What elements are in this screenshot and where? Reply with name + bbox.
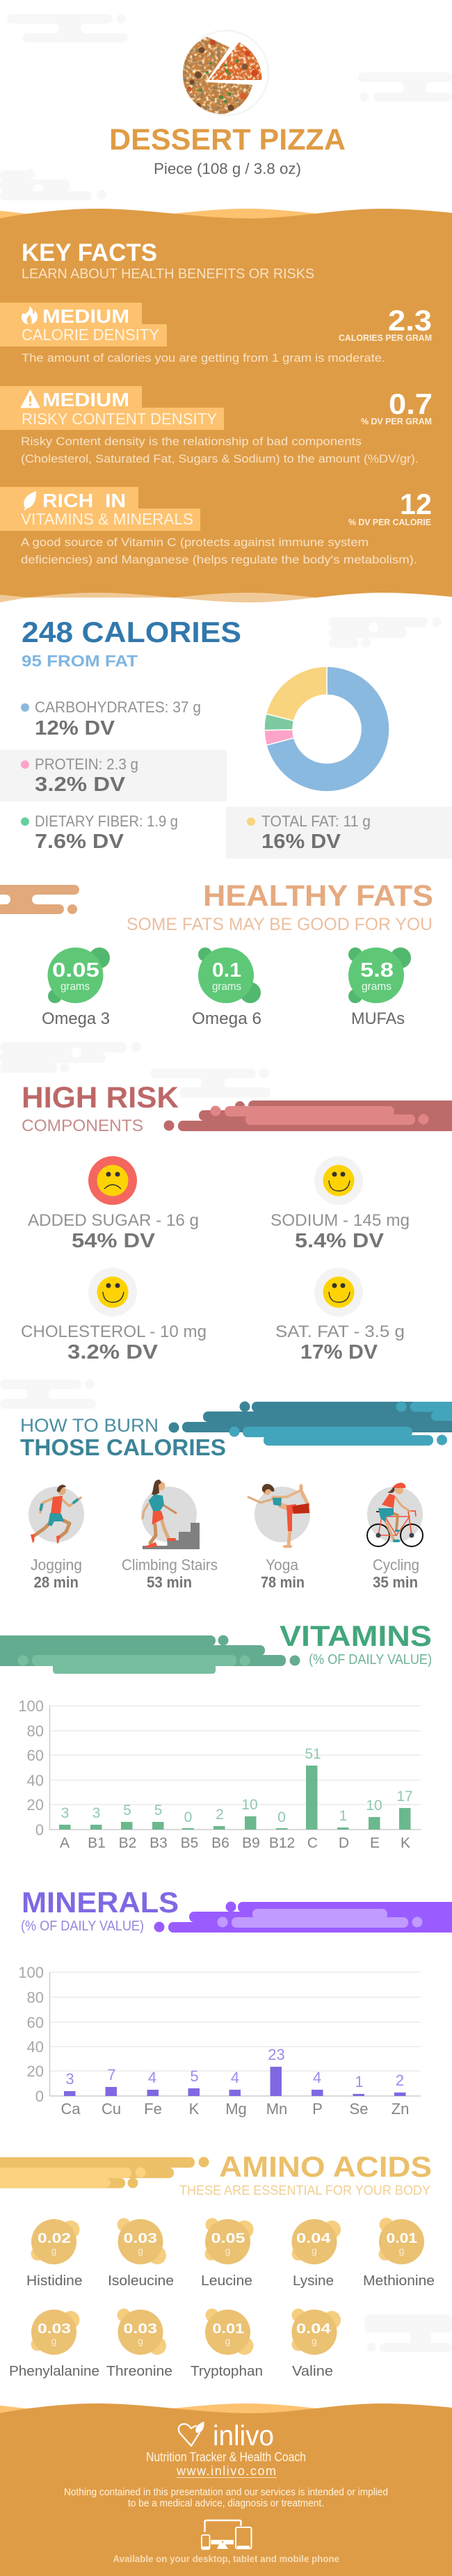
fat: omega 6	[192, 947, 261, 1028]
amino: threonine: 0.03	[124, 2321, 157, 2337]
website: www.inlivo.com	[176, 2464, 276, 2478]
amino: valine: 0.04	[296, 2321, 331, 2337]
bar chart: minerals: 7	[107, 2066, 116, 2083]
amino: valine: Valine	[292, 2364, 333, 2379]
bar chart: vitamins: 17	[396, 1789, 413, 1805]
subheading: THESE ARE ESSENTIAL FOR YOUR BODY	[179, 2184, 430, 2198]
bar chart: minerals: Ca	[60, 2100, 81, 2118]
bar chart: minerals	[18, 1964, 421, 2118]
bar chart: vitamins	[18, 1697, 421, 1851]
activity: yoga: Yoga	[266, 1556, 299, 1574]
bar chart: vitamins: 20	[27, 1796, 44, 1814]
activity: cycling	[367, 1482, 423, 1591]
panel: amino acids	[0, 2150, 435, 2379]
bar chart: vitamins: 40	[27, 1772, 44, 1789]
amino: histidine	[26, 2219, 82, 2289]
availability note: Available on your desktop, tablet and mobile phone	[113, 2553, 339, 2564]
description: The amount of calories you are getting from 1 gram is moderate.	[22, 351, 385, 365]
logo: inlivo	[213, 2419, 274, 2451]
banner	[0, 2157, 209, 2189]
bar chart: minerals: 0	[35, 2088, 44, 2105]
panel: healthy fats	[0, 879, 433, 1028]
item: cholesterol	[21, 1267, 207, 1363]
subheading: COMPONENTS	[22, 1117, 143, 1135]
bar chart: vitamins: 10	[366, 1798, 382, 1814]
item: added sugar: 54% DV	[72, 1230, 156, 1252]
amino: methionine	[363, 2218, 435, 2289]
heading: 248 CALORIES	[22, 616, 241, 648]
item: cholesterol: CHOLESTEROL - 10 mg	[21, 1322, 207, 1341]
banner	[154, 1902, 452, 1933]
amino: isoleucine: 0.03	[124, 2230, 157, 2246]
bar chart: minerals: Cu	[102, 2100, 121, 2118]
value: 0.7	[389, 387, 433, 420]
bar chart: vitamins: 0	[35, 1821, 44, 1839]
amino: phenylalanine: Phenylalanine	[9, 2364, 99, 2379]
amino: threonine: g	[138, 2335, 143, 2346]
value: 2.3	[388, 304, 432, 337]
amino: phenylalanine	[9, 2310, 99, 2379]
bar chart: minerals: 1	[355, 2073, 364, 2090]
fat: omega 3	[42, 947, 110, 1028]
amino: threonine	[106, 2308, 172, 2379]
fat: omega 3: 0.05	[52, 959, 99, 982]
bar chart: vitamins: 5	[154, 1802, 162, 1818]
item: added sugar	[28, 1156, 199, 1252]
amino: methionine: g	[399, 2245, 404, 2256]
amino: tryptophan	[191, 2308, 263, 2379]
subheading: (% OF DAILY VALUE)	[309, 1652, 432, 1667]
activity: climbing stairs: 53 min	[147, 1574, 192, 1591]
bar chart: vitamins: 0	[277, 1809, 286, 1825]
legend: total fat: 16% DV	[261, 831, 341, 853]
item: saturated fat	[275, 1267, 405, 1363]
legend: dietary fiber: DIETARY FIBER: 1.9 g	[35, 813, 178, 830]
header: pizza image and title	[109, 31, 346, 177]
bar chart: vitamins: 80	[27, 1722, 44, 1740]
amino: isoleucine: Isoleucine	[108, 2273, 174, 2289]
panel: how to burn calories	[20, 1401, 452, 1591]
wave	[0, 2403, 320, 2424]
bar chart: vitamins: B3	[150, 1835, 168, 1851]
panel: minerals	[18, 1886, 452, 2118]
amino: histidine: g	[51, 2245, 56, 2256]
wave top	[0, 209, 320, 230]
bar chart: minerals: Fe	[144, 2100, 162, 2118]
description: deficiencies) and Manganese (helps regulate the body's metabolism).	[21, 553, 417, 566]
activity: climbing stairs	[122, 1480, 218, 1591]
icon: leaf	[24, 491, 36, 511]
fact: calorie density	[0, 303, 432, 365]
bar chart: vitamins: 1	[339, 1808, 347, 1824]
title: DESSERT PIZZA	[109, 123, 346, 157]
item: cholesterol: 3.2% DV	[67, 1341, 159, 1363]
bar chart: minerals: K	[189, 2100, 200, 2118]
bar chart: minerals: 100	[18, 1964, 44, 1981]
bar chart: vitamins: B2	[119, 1835, 136, 1851]
amino: threonine: Threonine	[106, 2364, 172, 2379]
disclaimer: to be a medical advice, diagnosis or treatment.	[128, 2497, 324, 2509]
amino: histidine: 0.02	[38, 2230, 71, 2246]
amino: leucine	[201, 2218, 253, 2289]
activity: climbing stairs: Climbing Stairs	[122, 1556, 218, 1574]
legend: dietary fiber	[21, 813, 178, 853]
amino: phenylalanine: g	[51, 2335, 56, 2346]
fact: risky content density	[0, 386, 433, 465]
description: (Cholesterol, Saturated Fat, Sugars & Sodium) to the amount (%DV/gr).	[21, 452, 419, 465]
tagline: Nutrition Tracker & Health Coach	[146, 2450, 306, 2464]
rating: RICH IN	[42, 490, 126, 511]
rating: MEDIUM	[42, 305, 129, 327]
activity: yoga	[248, 1484, 310, 1591]
unit: % DV PER CALORIE	[348, 517, 431, 527]
amino: phenylalanine: 0.03	[38, 2321, 71, 2337]
heading: HIGH RISK	[22, 1081, 179, 1114]
bar chart: minerals: Se	[350, 2100, 368, 2118]
rating: MEDIUM	[42, 389, 129, 410]
fat: MUFAs: 5.8	[360, 959, 394, 982]
amino: leucine: Leucine	[201, 2273, 252, 2289]
heading line 1: HOW TO BURN	[20, 1415, 159, 1436]
bar chart: vitamins: B5	[181, 1835, 198, 1851]
bar chart: minerals: 4	[313, 2069, 321, 2086]
heading: HEALTHY FATS	[203, 879, 433, 913]
fat: omega 6: grams	[212, 981, 241, 993]
subheading: LEARN ABOUT HEALTH BENEFITS OR RISKS	[22, 266, 314, 282]
panel: high risk components	[21, 1081, 452, 1363]
amino: histidine: Histidine	[26, 2273, 82, 2289]
label: CALORIE DENSITY	[22, 326, 159, 344]
bar chart: vitamins: B1	[88, 1835, 106, 1851]
bar chart: minerals: 2	[396, 2072, 404, 2089]
bar chart: minerals: Mg	[225, 2100, 247, 2118]
bar chart: vitamins: K	[401, 1835, 410, 1851]
bar chart: vitamins: 10	[241, 1797, 258, 1813]
logo	[179, 2419, 274, 2451]
subheading: SOME FATS MAY BE GOOD FOR YOU	[127, 915, 433, 934]
bar chart: vitamins: B6	[211, 1835, 229, 1851]
amino: isoleucine	[108, 2218, 174, 2289]
bar chart: vitamins: 0	[184, 1809, 192, 1825]
subheading: (% OF DAILY VALUE)	[21, 1919, 144, 1934]
item: saturated fat: 17% DV	[300, 1341, 378, 1363]
banner	[0, 885, 81, 914]
panel: key facts	[0, 209, 452, 602]
donut chart	[264, 666, 389, 792]
activity: jogging: Jogging	[31, 1556, 82, 1574]
bar chart: minerals: 80	[27, 1989, 44, 2006]
bar chart: minerals: Zn	[392, 2100, 409, 2118]
label: RISKY CONTENT DENSITY	[22, 410, 217, 428]
item: saturated fat: SAT. FAT - 3.5 g	[275, 1322, 405, 1341]
label: VITAMINS & MINERALS	[21, 510, 193, 528]
legend: carbohydrates	[21, 698, 201, 739]
fat: omega 3: grams	[60, 981, 90, 993]
legend: dietary fiber: 7.6% DV	[35, 831, 124, 853]
heading: MINERALS	[22, 1886, 179, 1919]
fat: omega 6: 0.1	[212, 959, 241, 982]
icon: devices	[202, 2520, 252, 2549]
amino: lysine: g	[312, 2245, 317, 2256]
bar chart: vitamins: 3	[92, 1805, 100, 1821]
description: A good source of Vitamin C (protects against immune system	[21, 536, 369, 549]
panel: calories	[0, 616, 452, 858]
activity: cycling: 35 min	[373, 1574, 418, 1591]
amino: tryptophan: Tryptophan	[191, 2364, 263, 2379]
disclaimer: Nothing contained in this presentation and our services is intended or implied	[64, 2486, 388, 2498]
heading line 2: THOSE CALORIES	[20, 1434, 226, 1460]
amino: isoleucine: g	[138, 2245, 143, 2256]
legend: carbohydrates: 12% DV	[35, 717, 115, 739]
legend: protein: PROTEIN: 2.3 g	[35, 755, 138, 773]
legend: protein: 3.2% DV	[35, 774, 126, 796]
bar chart: vitamins: B9	[242, 1835, 260, 1851]
bar chart: vitamins: 51	[305, 1746, 321, 1762]
value: 12	[400, 488, 432, 520]
bar chart: vitamins: D	[339, 1835, 349, 1851]
fat: omega 6: Omega 6	[192, 1009, 261, 1028]
fat: omega 3: Omega 3	[42, 1009, 110, 1028]
bar chart: vitamins: E	[370, 1835, 380, 1851]
amino: tryptophan: 0.01	[213, 2321, 244, 2337]
activity: cycling: Cycling	[373, 1556, 419, 1574]
bar chart: minerals: 40	[27, 2038, 44, 2056]
item: sodium: SODIUM - 145 mg	[271, 1211, 410, 1230]
amino: methionine: 0.01	[387, 2230, 417, 2246]
panel: footer	[0, 2403, 452, 2576]
legend: total fat: TOTAL FAT: 11 g	[261, 813, 371, 830]
amino: lysine	[292, 2219, 341, 2289]
serving size: Piece (108 g / 3.8 oz)	[154, 160, 301, 177]
heading: AMINO ACIDS	[219, 2150, 432, 2183]
item: added sugar: ADDED SUGAR - 16 g	[28, 1211, 199, 1230]
heading: KEY FACTS	[22, 239, 157, 266]
icon: warning	[21, 390, 40, 408]
bar chart: vitamins: 2	[216, 1807, 224, 1823]
amino: lysine: Lysine	[293, 2273, 334, 2289]
amino: tryptophan: g	[225, 2335, 230, 2346]
bar chart: minerals: 4	[231, 2069, 239, 2086]
bar chart: minerals: 23	[268, 2046, 285, 2063]
bar chart: vitamins: 60	[27, 1747, 44, 1764]
bar chart: minerals: 3	[65, 2070, 74, 2088]
activity: jogging	[29, 1485, 84, 1591]
description: Risky Content density is the relationship of bad components	[21, 435, 362, 448]
bar chart: minerals: 20	[27, 2063, 44, 2080]
amino: valine	[292, 2308, 341, 2379]
banner	[168, 1401, 452, 1446]
icon: flame	[22, 306, 38, 324]
bar chart: minerals: Mn	[266, 2100, 287, 2118]
activity: yoga: 78 min	[261, 1574, 305, 1591]
fat: MUFAs: MUFAs	[351, 1009, 405, 1028]
bar chart: vitamins: C	[307, 1835, 318, 1851]
amino: valine: g	[312, 2335, 317, 2346]
legend: protein	[21, 755, 138, 796]
bar chart: minerals: 5	[190, 2067, 199, 2085]
banner	[164, 1101, 452, 1131]
bar chart: minerals: P	[312, 2100, 323, 2118]
fat: MUFAs: grams	[362, 981, 392, 993]
bar chart: vitamins: 100	[18, 1697, 44, 1715]
bar chart: vitamins: 3	[61, 1805, 69, 1821]
activity: jogging: 28 min	[33, 1574, 79, 1591]
fat: MUFAs	[348, 947, 411, 1028]
amino: leucine: g	[225, 2245, 230, 2256]
row backgrounds	[0, 750, 452, 858]
bar chart: vitamins: B12	[269, 1835, 295, 1851]
icon: pizza	[181, 31, 268, 115]
item: sodium: 5.4% DV	[295, 1230, 385, 1252]
fact: rich in vitamins and minerals	[0, 487, 432, 566]
bar chart: minerals: 4	[148, 2069, 156, 2086]
panel: vitamins	[0, 1619, 432, 1851]
amino: methionine: Methionine	[363, 2273, 435, 2289]
item: sodium	[271, 1156, 410, 1252]
legend: total fat	[247, 813, 371, 853]
bar chart: vitamins: 5	[123, 1802, 131, 1818]
unit: % DV PER GRAM	[361, 416, 432, 426]
bar chart: vitamins: A	[60, 1835, 70, 1851]
bar chart: minerals: 60	[27, 2014, 44, 2031]
amino: lysine: 0.04	[296, 2230, 331, 2246]
amino: leucine: 0.05	[211, 2230, 245, 2246]
banner	[0, 1635, 300, 1674]
heading: VITAMINS	[280, 1619, 432, 1652]
subheading: 95 FROM FAT	[22, 652, 138, 670]
legend: carbohydrates: CARBOHYDRATES: 37 g	[35, 698, 201, 716]
unit: CALORIES PER GRAM	[339, 333, 432, 343]
